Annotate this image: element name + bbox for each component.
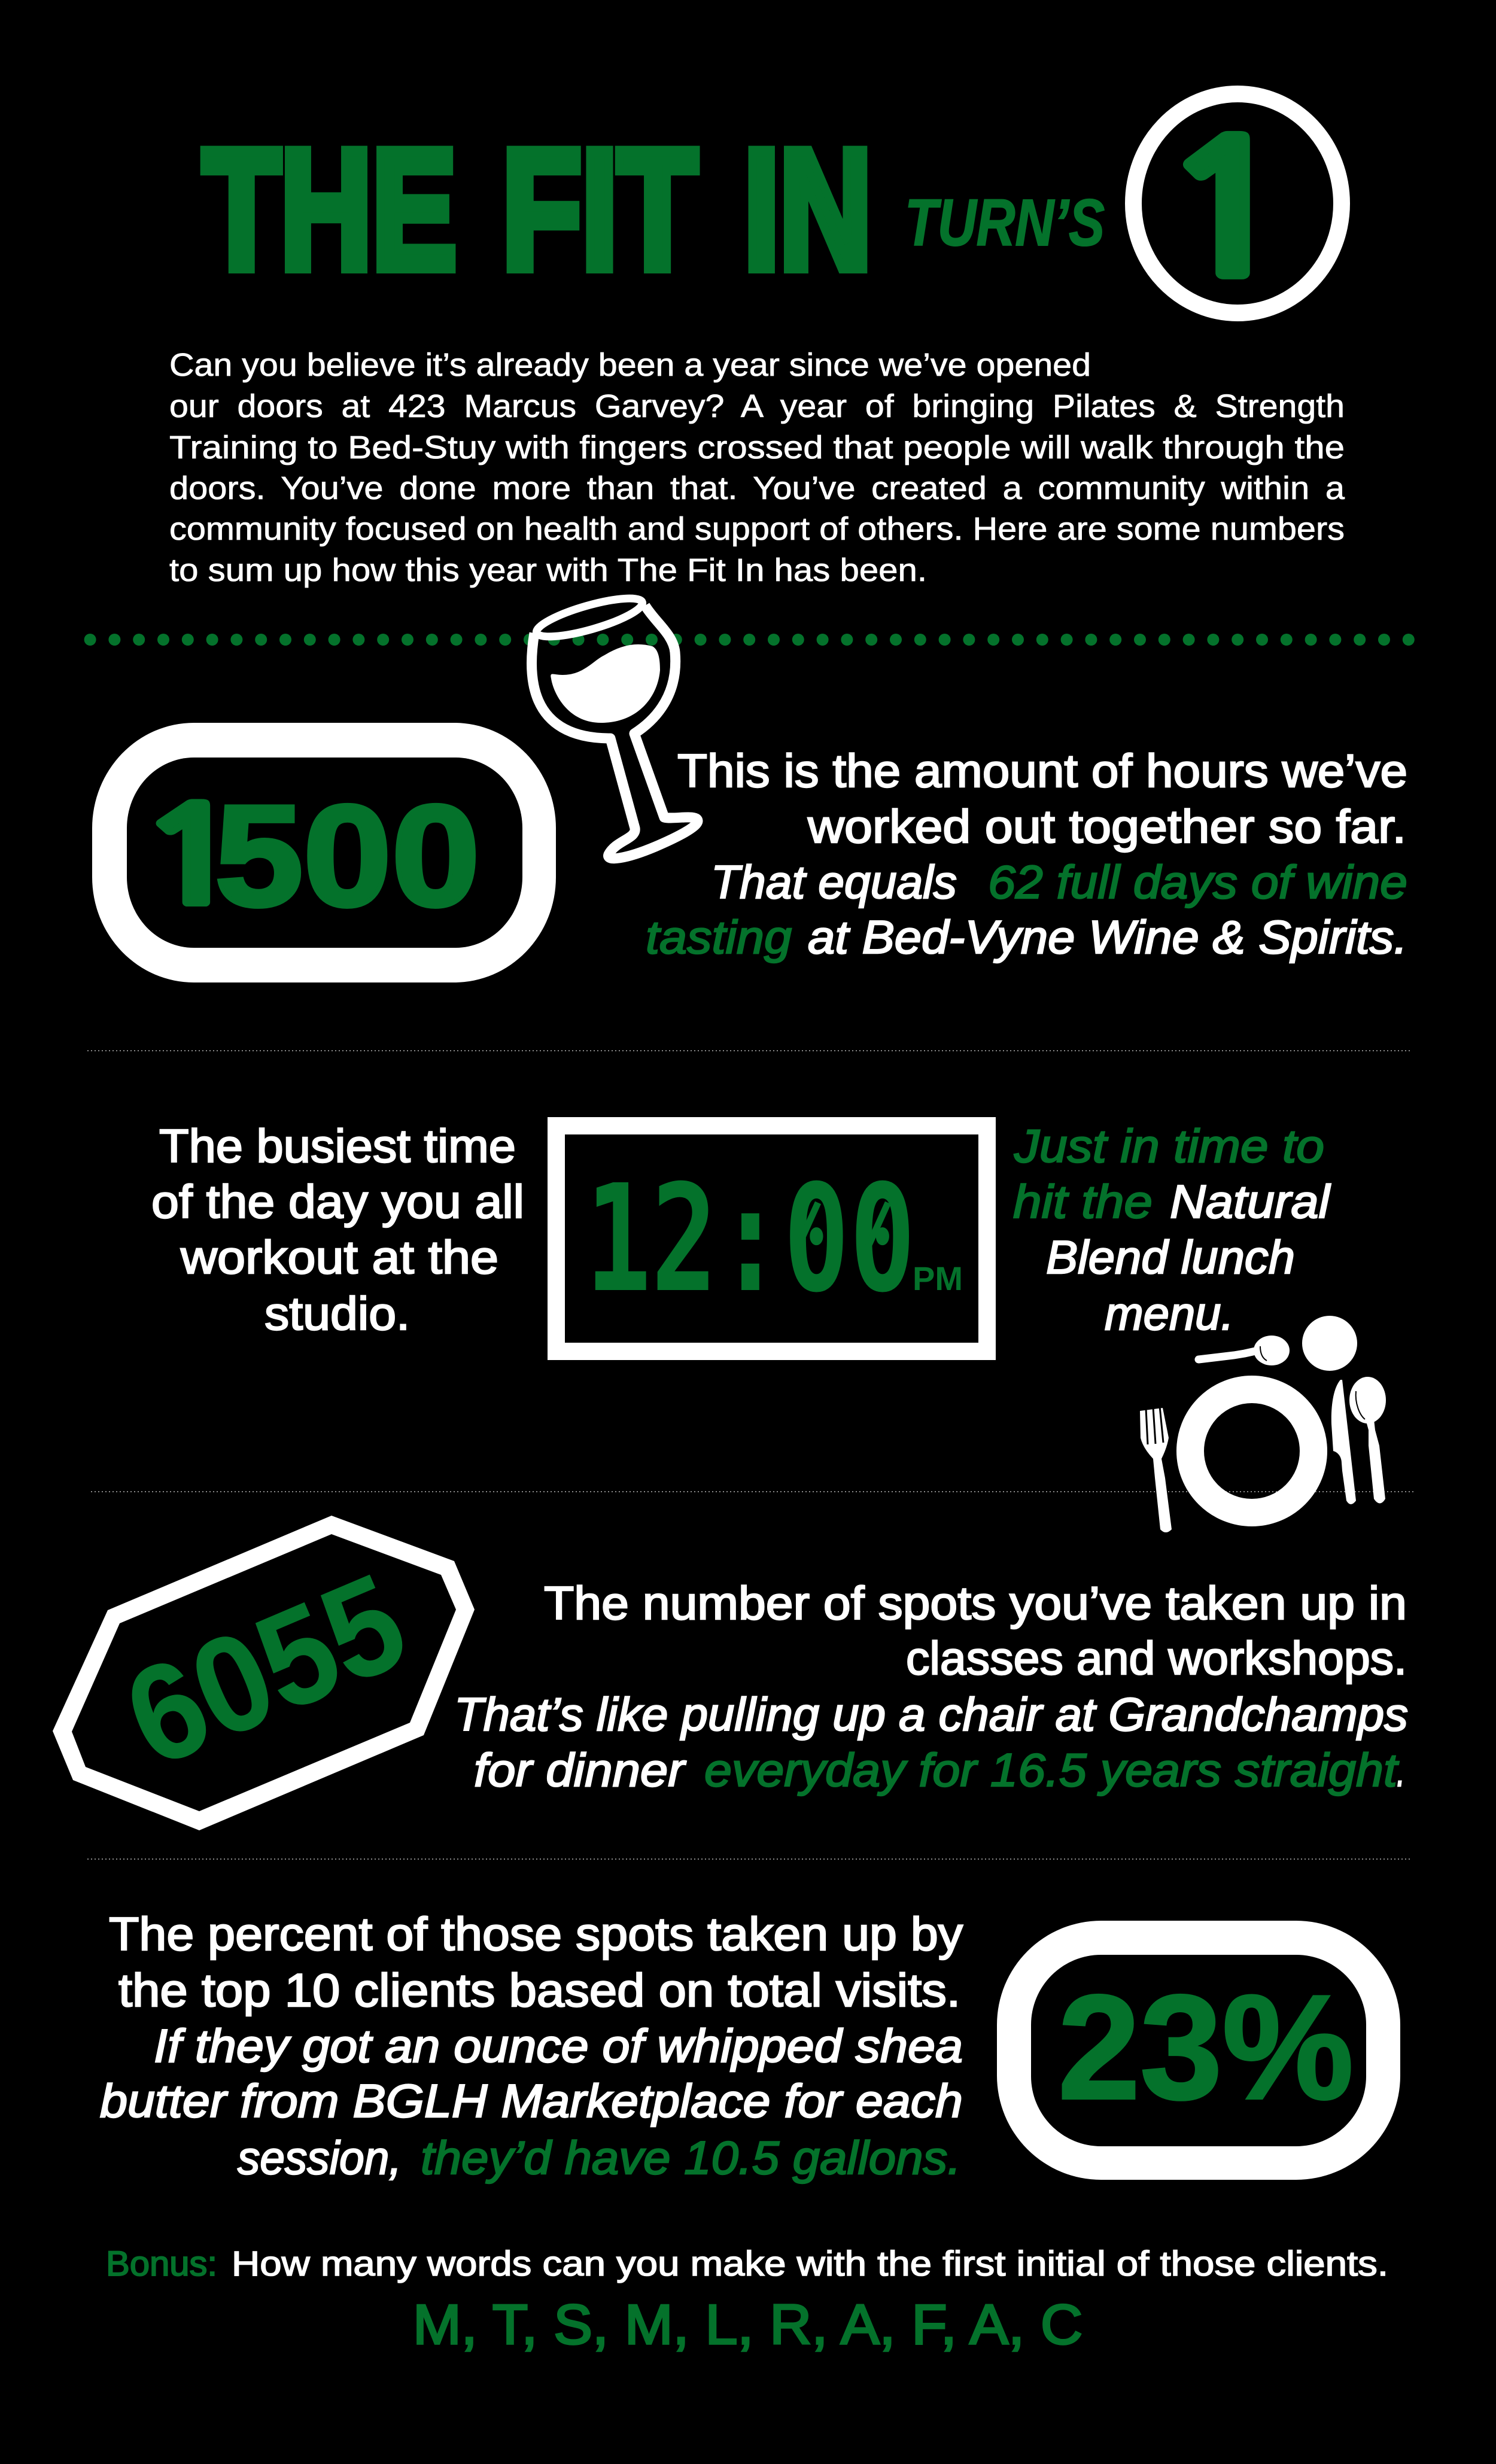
intro paragraph: Can you believe it’s already been a year since we’ve opened bbox=[169, 347, 1091, 383]
clock panel: 12:00 PM: 12:00 bbox=[585, 1154, 916, 1325]
spoon bbox=[1349, 1377, 1386, 1503]
stat badge: 1500 bbox=[92, 723, 556, 982]
text block: hours worked out: tasting bbox=[646, 911, 792, 963]
badge: number one in ring: 1 bbox=[1159, 120, 1296, 302]
intro paragraph: our doors at 423 Marcus Garvey? A year of bringing Pilates & Strength bbox=[169, 388, 1345, 424]
stat badge: 6055 bbox=[53, 1516, 475, 1830]
text block: percent of spots: butter from BGLH Marketplace for each bbox=[100, 2074, 963, 2127]
bonus line: Bonus: bbox=[106, 2244, 217, 2283]
intro paragraph bbox=[169, 347, 1345, 588]
title: FIT bbox=[502, 115, 697, 305]
text block: percent of spots bbox=[100, 1908, 963, 2184]
text block: hours worked out: 62 full days of wine bbox=[988, 856, 1407, 908]
icon: wine glass bbox=[531, 591, 698, 859]
text block: percent of spots: session, bbox=[238, 2131, 402, 2184]
text block: busiest time: studio. bbox=[264, 1287, 410, 1340]
clock panel: 12:00 PM: PM bbox=[913, 1260, 963, 1297]
title bbox=[203, 115, 872, 305]
text block: spots taken: classes and workshops. bbox=[906, 1632, 1407, 1684]
client initials: M, T, S, M, L, R, A, F, A, C bbox=[413, 2293, 1083, 2356]
text block: percent of spots: If they got an ounce of whipped shea bbox=[154, 2019, 963, 2072]
intro paragraph: Training to Bed-Stuy with fingers crossed that people will walk through the bbox=[169, 430, 1345, 466]
clock panel: 12:00 PM bbox=[557, 1126, 987, 1351]
text block: spots taken: everyday for 16.5 years straight bbox=[704, 1744, 1400, 1796]
intro paragraph: community focused on health and support of others. Here are some numbers bbox=[169, 511, 1345, 547]
text block: busiest time: The busiest time bbox=[159, 1120, 516, 1172]
text block: busiest time: of the day you all bbox=[151, 1175, 524, 1228]
text block: spots taken: for dinner bbox=[474, 1744, 686, 1796]
knife bbox=[1331, 1380, 1356, 1504]
text block: percent of spots: The percent of those spots taken up by bbox=[109, 1908, 963, 1960]
text block: spots taken: . bbox=[1397, 1744, 1405, 1796]
text block: lunch menu: hit the bbox=[1013, 1175, 1153, 1228]
small spoon bbox=[1199, 1336, 1290, 1365]
title: THE bbox=[203, 115, 457, 305]
intro paragraph: to sum up how this year with The Fit In has been. bbox=[169, 552, 927, 588]
text block: lunch menu: Just in time to bbox=[1014, 1120, 1324, 1172]
text block: lunch menu: Blend lunch bbox=[1046, 1231, 1295, 1283]
icon: place setting bbox=[1140, 1316, 1386, 1532]
text block: hours worked out: This is the amount of hours we’ve bbox=[677, 744, 1407, 797]
title: IN bbox=[744, 115, 872, 305]
text block: lunch menu bbox=[1013, 1120, 1331, 1340]
bread plate bbox=[1302, 1316, 1357, 1371]
text block: percent of spots: the top 10 clients based on total visits. bbox=[118, 1964, 960, 2016]
stat badge: 1500: 1 bbox=[136, 792, 248, 924]
text block: spots taken: The number of spots you’ve taken up in bbox=[544, 1577, 1407, 1629]
text block: hours worked out: That equals bbox=[711, 856, 957, 908]
text block: hours worked out: worked out together so far. bbox=[807, 800, 1406, 853]
intro paragraph: doors. You’ve done more than that. You’ve created a community within a bbox=[169, 470, 1345, 506]
fork bbox=[1140, 1406, 1172, 1532]
stat badge: 23%: 23% bbox=[1058, 1964, 1354, 2130]
text block: lunch menu: Natural bbox=[1170, 1175, 1331, 1228]
stat badge: 23% bbox=[997, 1921, 1400, 2180]
text block: spots taken bbox=[454, 1577, 1408, 1796]
text block: hours worked out bbox=[646, 744, 1407, 963]
text block: busiest time bbox=[151, 1120, 524, 1340]
bonus line: How many words can you make with the first initial of those clients. bbox=[232, 2244, 1388, 2283]
badge: number one in ring bbox=[1133, 94, 1342, 313]
text block: hours worked out: at Bed-Vyne Wine & Spirits. bbox=[808, 911, 1407, 963]
subtitle: turn's: TURN’S bbox=[905, 186, 1105, 260]
stat badge: 1500: 500 bbox=[215, 775, 480, 936]
stat badge: 6055: 6055 bbox=[105, 1545, 425, 1796]
text block: lunch menu: menu. bbox=[1105, 1287, 1234, 1340]
text block: percent of spots: they’d have 10.5 gallons. bbox=[421, 2131, 961, 2184]
plate bbox=[1190, 1389, 1313, 1513]
text block: spots taken: That’s like pulling up a chair at Grandchamps bbox=[454, 1688, 1408, 1741]
text block: busiest time: workout at the bbox=[180, 1231, 498, 1283]
